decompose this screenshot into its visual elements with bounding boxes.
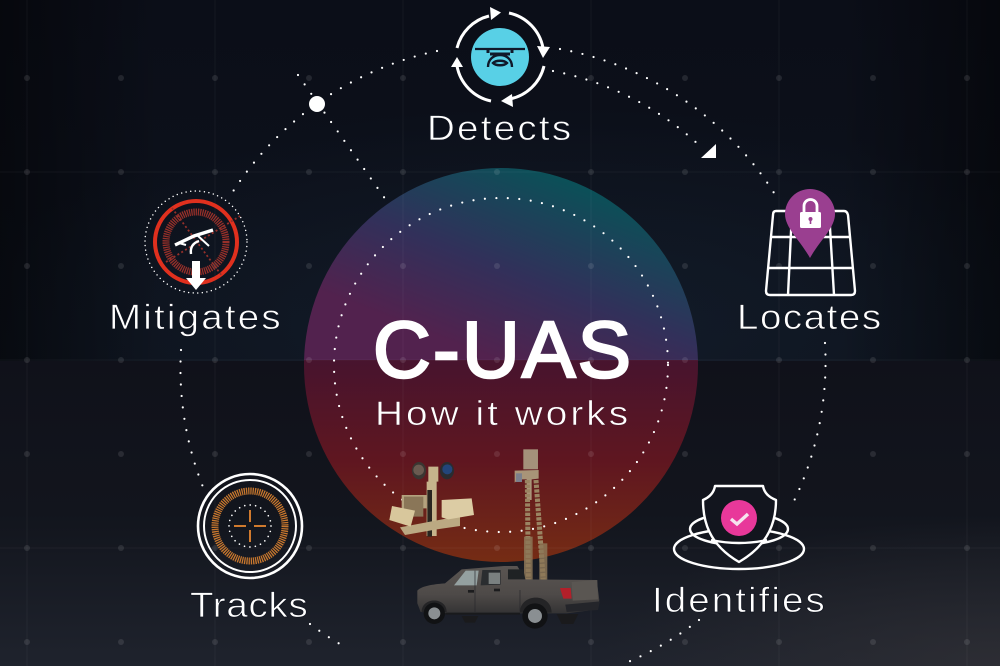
white node dot [309,96,325,112]
front wheel [424,603,445,624]
arrowhead on inner arc [701,144,716,158]
pickup truck [417,566,600,629]
dotted inner circle [334,198,668,532]
telescoping tower sensor [515,449,547,580]
icon: locates map with padlock pin [766,189,855,295]
icon: detects drone with rotating arrows [451,7,550,107]
camera mast sensor cluster [389,462,474,537]
icon: mitigates red target [145,191,247,293]
label: Mitigates: Mitigates [109,298,281,337]
icon: tracks crosshair target [198,474,302,578]
label: Detects: Detects [427,109,571,148]
central gradient circle [304,168,698,562]
sensor equipment [389,449,547,580]
subtitle: How it works [375,394,628,432]
title: C-UAS [373,305,631,394]
rear wheel [522,603,548,629]
label: Tracks: Tracks [190,586,308,625]
label: Locates: Locates [737,298,881,337]
label: Identifies: Identifies [652,581,825,620]
icon: identifies shield and rings [674,486,804,569]
dotted orbit arcs [180,49,826,662]
